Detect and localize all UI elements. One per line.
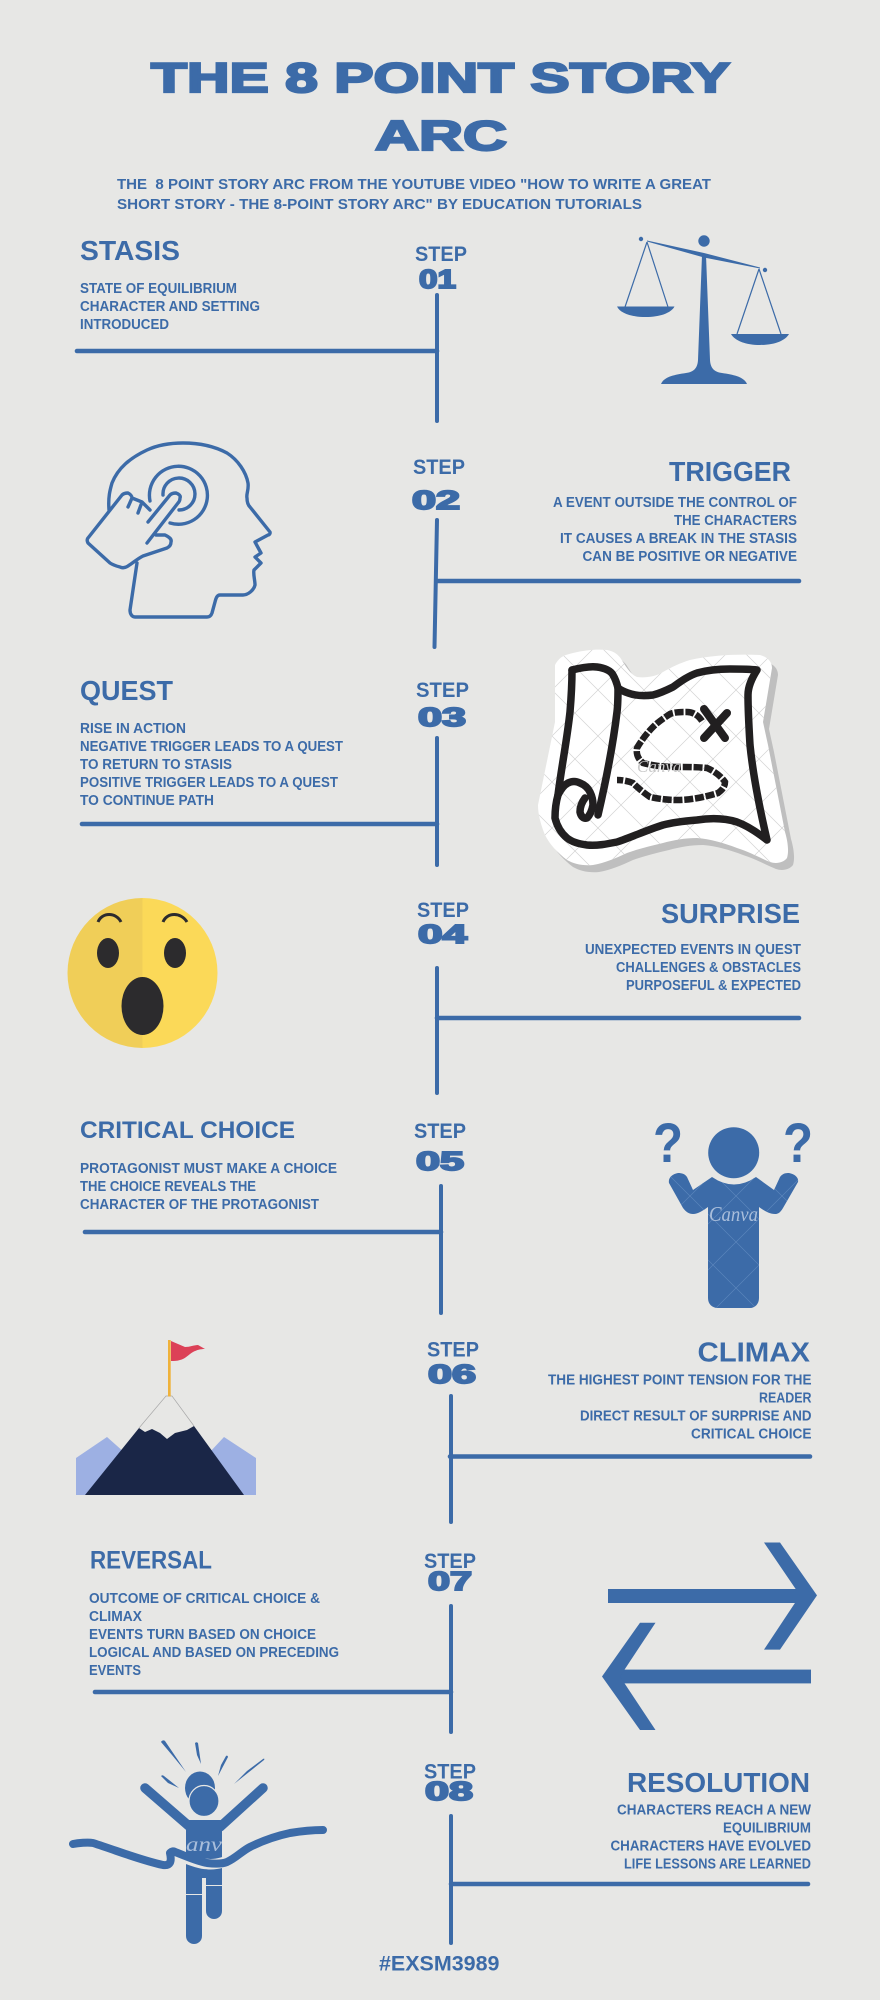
connector lines 05	[85, 1186, 441, 1313]
text: reversal description: OUTCOME OF CRITICAL CHOICE &	[89, 1591, 320, 1607]
step label 06	[427, 1338, 479, 1389]
title: THE 8 POINT STORY	[151, 54, 730, 101]
step label 02: STEP	[413, 456, 465, 479]
text: climax description	[548, 1372, 812, 1442]
text: trigger description: IT CAUSES A BREAK IN THE STASIS	[560, 531, 797, 547]
icon: head with finger touching target	[87, 443, 270, 617]
icon: balance scale	[617, 235, 789, 384]
text: critical choice description: CHARACTER OF THE PROTAGONIST	[80, 1197, 319, 1213]
text: quest description: NEGATIVE TRIGGER LEADS TO A QUEST	[80, 739, 343, 755]
heading: reversal: REVERSAL	[90, 1546, 212, 1574]
panel: step 1 stasis	[77, 235, 789, 421]
icon: treasure map: Canva	[637, 757, 681, 776]
text: climax description: CRITICAL CHOICE	[691, 1426, 812, 1442]
text: trigger description: A EVENT OUTSIDE THE CONTROL OF	[553, 495, 797, 511]
text: climax description: READER	[759, 1390, 812, 1406]
panel: step 2 trigger	[87, 443, 799, 647]
text: climax description: THE HIGHEST POINT TENSION FOR THE	[548, 1372, 812, 1388]
subtitle: THE 8 POINT STORY ARC FROM THE YOUTUBE VIDEO "HOW TO WRITE A GREAT	[117, 176, 711, 193]
text: stasis description	[80, 281, 260, 333]
text: reversal description: LOGICAL AND BASED ON PRECEDING	[89, 1645, 339, 1661]
title: ARC	[375, 112, 507, 159]
text: resolution description: CHARACTERS HAVE EVOLVED	[610, 1838, 811, 1854]
icon: reversing arrows	[602, 1542, 817, 1730]
step label 06: STEP	[427, 1338, 479, 1362]
heading: climax: CLIMAX	[698, 1336, 810, 1368]
step label 03: 03	[418, 702, 466, 732]
step label 05: 05	[416, 1146, 464, 1176]
step label 04	[417, 899, 469, 949]
heading: surprise: SURPRISE	[661, 898, 800, 929]
text: critical choice description: PROTAGONIST MUST MAKE A CHOICE	[80, 1161, 337, 1177]
title	[151, 54, 730, 159]
text: stasis description: STATE OF EQUILIBRIUM	[80, 281, 237, 297]
icon: runner crossing finish line: anv	[186, 1832, 223, 1856]
step label 05: STEP	[414, 1120, 466, 1143]
step label 05	[414, 1120, 466, 1176]
step label 08	[424, 1760, 476, 1806]
icon: runner crossing finish line	[73, 1740, 323, 1944]
heading: resolution: RESOLUTION	[627, 1767, 810, 1798]
text: critical choice description: THE CHOICE REVEALS THE	[80, 1179, 256, 1195]
text: critical choice description	[80, 1161, 337, 1213]
heading: stasis: STASIS	[80, 235, 180, 266]
text: resolution description	[610, 1802, 811, 1872]
step label 07: STEP	[424, 1550, 476, 1573]
text: resolution description: EQUILIBRIUM	[723, 1820, 811, 1836]
text: surprise description: PURPOSEFUL & EXPECTED	[626, 978, 801, 994]
text: surprise description: CHALLENGES & OBSTACLES	[616, 960, 801, 976]
text: reversal description: EVENTS TURN BASED ON CHOICE	[89, 1627, 316, 1643]
subtitle: SHORT STORY - THE 8-POINT STORY ARC" BY EDUCATION TUTORIALS	[117, 196, 642, 213]
icon: confused person with question marks	[653, 1111, 813, 1308]
step label 07: 07	[428, 1566, 472, 1596]
connector lines 06	[450, 1396, 810, 1522]
icon: surprised emoji	[68, 898, 218, 1048]
panel: step 6 climax	[76, 1336, 812, 1522]
text: surprise description: UNEXPECTED EVENTS IN QUEST	[585, 942, 801, 958]
text: quest description: RISE IN ACTION	[80, 721, 186, 737]
step label 03	[416, 679, 469, 732]
connector lines 01	[77, 295, 437, 421]
icon: mountain with flag	[76, 1340, 256, 1495]
heading: critical choice: CRITICAL CHOICE	[80, 1117, 295, 1144]
connector lines 02	[434, 520, 799, 647]
step label 02: 02	[412, 485, 460, 515]
icon: confused person with question marks: Canva	[709, 1202, 758, 1226]
text: trigger description: THE CHARACTERS	[674, 513, 797, 529]
icon: confused person with question marks: ?	[783, 1111, 813, 1174]
icon: confused person with question marks: ?	[653, 1111, 683, 1174]
text: reversal description: CLIMAX	[89, 1609, 142, 1625]
text: quest description	[80, 721, 343, 809]
text: trigger description	[553, 495, 797, 565]
step label 08: 08	[425, 1776, 473, 1806]
step label 01	[415, 243, 467, 294]
text: quest description: TO RETURN TO STASIS	[80, 757, 232, 773]
text: reversal description	[89, 1591, 339, 1679]
panel: step 5 critical choice	[80, 1111, 813, 1313]
text: reversal description: EVENTS	[89, 1663, 141, 1679]
text: resolution description: LIFE LESSONS ARE LEARNED	[624, 1856, 811, 1872]
step label 02	[412, 456, 465, 515]
step label 04: STEP	[417, 899, 469, 922]
text: stasis description: CHARACTER AND SETTING	[80, 299, 260, 315]
text: resolution description: CHARACTERS REACH A NEW	[617, 1802, 811, 1818]
text: stasis description: INTRODUCED	[80, 317, 169, 333]
subtitle	[117, 176, 711, 213]
heading: trigger: TRIGGER	[669, 456, 791, 487]
panel: step 3 quest	[80, 650, 794, 872]
text: trigger description: CAN BE POSITIVE OR NEGATIVE	[582, 549, 797, 565]
connector lines 03	[82, 738, 437, 865]
panel: step 8 resolution	[73, 1740, 811, 1944]
text: surprise description	[585, 942, 801, 994]
text: quest description: POSITIVE TRIGGER LEADS TO A QUEST	[80, 775, 338, 791]
step label 07	[424, 1550, 476, 1596]
panel: step 7 reversal	[89, 1542, 817, 1732]
connector lines 04	[437, 968, 799, 1093]
connector lines 07	[95, 1606, 451, 1732]
step label 08: STEP	[424, 1760, 476, 1784]
heading: quest: QUEST	[80, 675, 173, 706]
step label 04: 04	[418, 919, 468, 949]
icon: treasure map	[538, 650, 794, 872]
text: quest description: TO CONTINUE PATH	[80, 793, 214, 809]
connector lines 08	[451, 1816, 808, 1943]
text: climax description: DIRECT RESULT OF SURPRISE AND	[580, 1408, 812, 1424]
step label 01: 01	[419, 264, 456, 294]
step label 01: STEP	[415, 243, 467, 266]
step label 06: 06	[428, 1359, 476, 1389]
footer hashtag: #EXSM3989	[379, 1952, 500, 1976]
panel: step 4 surprise	[68, 898, 801, 1093]
step label 03: STEP	[416, 679, 469, 702]
